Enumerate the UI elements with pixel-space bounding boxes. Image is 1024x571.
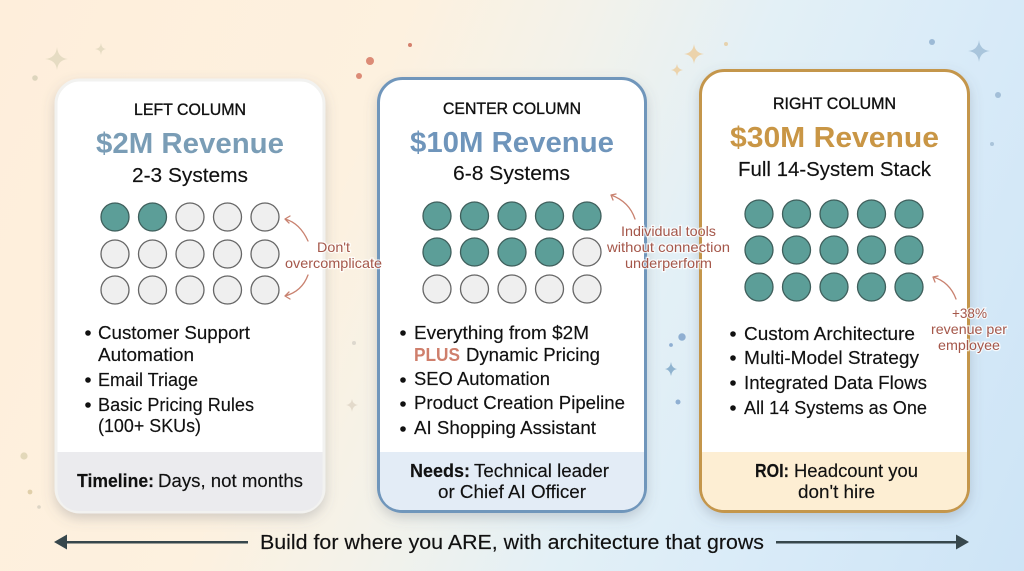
left bullet list: Automation (98, 345, 194, 365)
center bullet list: PLUS (414, 345, 460, 365)
center footer text: Needs: (410, 461, 470, 481)
right footer text (755, 461, 918, 502)
right bullet list: All 14 Systems as One (744, 398, 927, 418)
arrow: pointing left (54, 534, 248, 550)
left dot grid: 2 of 15 filled (101, 203, 279, 304)
left footer text: Timeline: (77, 471, 154, 491)
center footer text: or Chief AI Officer (438, 482, 586, 502)
left column label: LEFT COLUMN (134, 101, 246, 119)
callout: individual tools underperform: Individual tools (621, 223, 716, 239)
right systems count: Full 14-System Stack (738, 159, 932, 181)
tagline: Build for where you ARE, with architecture that grows (260, 531, 764, 554)
center bullet list (400, 323, 625, 438)
left footer text (77, 471, 303, 491)
left bullet list: Email Triage (98, 370, 198, 390)
callout: don't overcomplicate: overcomplicate (285, 255, 382, 271)
left footer text: Days, not months (158, 471, 303, 491)
right bullet list: Integrated Data Flows (744, 373, 927, 393)
callout: individual tools underperform (606, 194, 730, 271)
decorative sparkles and dots, cool side (665, 39, 1001, 404)
callout: individual tools underperform: underperform (625, 255, 712, 271)
left bullet list: Basic Pricing Rules (98, 395, 254, 415)
right footer text: don't hire (798, 482, 875, 502)
right bullet list (730, 324, 927, 418)
center revenue heading: $10M Revenue (410, 127, 614, 159)
decorative sparkles and dots, warm side (20, 43, 412, 509)
callout: don't overcomplicate: Don't (317, 239, 350, 255)
right footer band (702, 452, 967, 510)
center column label: CENTER COLUMN (443, 100, 581, 118)
callout: +38% revenue per employee: +38% (952, 305, 987, 321)
left revenue heading: $2M Revenue (96, 128, 284, 160)
center bullet list: Dynamic Pricing (466, 345, 600, 365)
center footer band (380, 452, 644, 510)
center systems count: 6-8 Systems (453, 163, 570, 185)
arrow: pointing right (776, 534, 969, 550)
callout: don't overcomplicate (285, 216, 382, 299)
right footer text: Headcount you (794, 461, 918, 481)
center dot grid: 9 of 15 filled (423, 202, 601, 303)
center footer text (410, 461, 609, 502)
right bullet list: Custom Architecture (744, 324, 915, 344)
right dot grid: all 15 filled (745, 200, 923, 301)
center bullet list: AI Shopping Assistant (414, 418, 596, 438)
panel: left column, $2M revenue (56, 80, 324, 512)
center bullet list: SEO Automation (414, 369, 550, 389)
right column label: RIGHT COLUMN (773, 95, 896, 113)
callout: +38% revenue per employee (931, 276, 1007, 353)
center bullet list: Product Creation Pipeline (414, 393, 625, 413)
left footer band (58, 452, 322, 511)
panel: right column, $30M revenue (700, 70, 968, 512)
right footer text: ROI: (755, 461, 789, 481)
panel: center column, $10M revenue (378, 78, 646, 512)
left bullet list: Customer Support (98, 323, 250, 343)
left systems count: 2-3 Systems (132, 165, 248, 187)
callout: individual tools underperform: without connection (606, 239, 730, 255)
center footer text: Technical leader (474, 461, 609, 481)
right revenue heading: $30M Revenue (730, 122, 939, 154)
left bullet list (85, 323, 254, 436)
left bullet list: (100+ SKUs) (98, 416, 201, 436)
right bullet list: Multi-Model Strategy (744, 348, 919, 368)
callout: +38% revenue per employee: revenue per (931, 321, 1007, 337)
center bullet list: Everything from $2M (414, 323, 589, 343)
callout: +38% revenue per employee: employee (938, 337, 1000, 353)
